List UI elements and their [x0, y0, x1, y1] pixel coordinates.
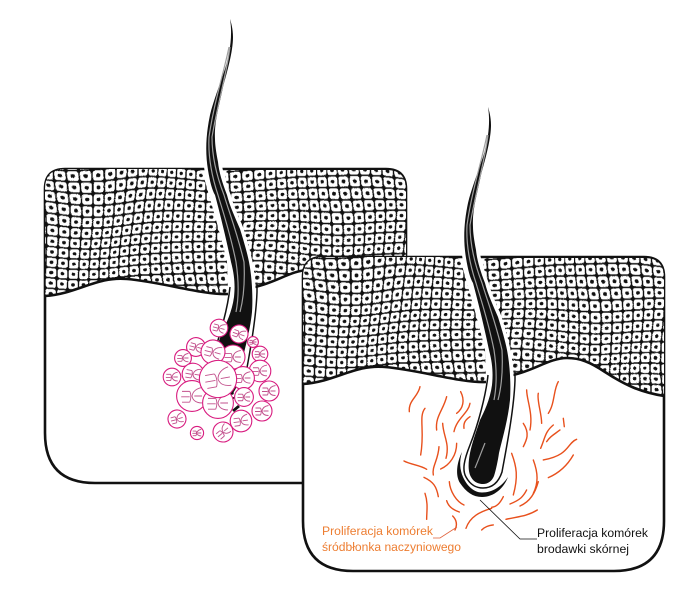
label: endothelial proliferation: śródbłonka naczyniowego: [322, 540, 461, 554]
hair bits peeking through cluster: [230, 391, 240, 412]
label: dermal papilla proliferation: Proliferacja komórek: [537, 526, 649, 540]
panel: left skin cross-section with pink cell cluster: [22, 19, 422, 483]
label: endothelial proliferation: Proliferacja komórek: [322, 524, 434, 538]
skin boundaries: [45, 270, 406, 308]
pink cell cluster: [163, 317, 279, 446]
panel outline: [303, 257, 664, 571]
panel: right skin cross-section with hair bulb: [280, 107, 680, 571]
skin cell layer right: [225, 170, 406, 285]
hair: [206, 19, 257, 400]
orange vessel strands: [404, 382, 577, 530]
label: dermal papilla proliferation: brodawki skórnej: [537, 542, 629, 556]
bulb outer sheath crescent: [457, 452, 508, 497]
leader line: dermal papilla: [480, 500, 537, 539]
skin cell layer left: [45, 169, 228, 295]
panel outline: [45, 169, 406, 483]
skin cell layer left: [303, 257, 486, 383]
skin boundaries: [303, 358, 664, 396]
hair: [457, 107, 515, 497]
skin cell layer right: [483, 258, 664, 394]
leader line: endothelial: [433, 527, 457, 538]
